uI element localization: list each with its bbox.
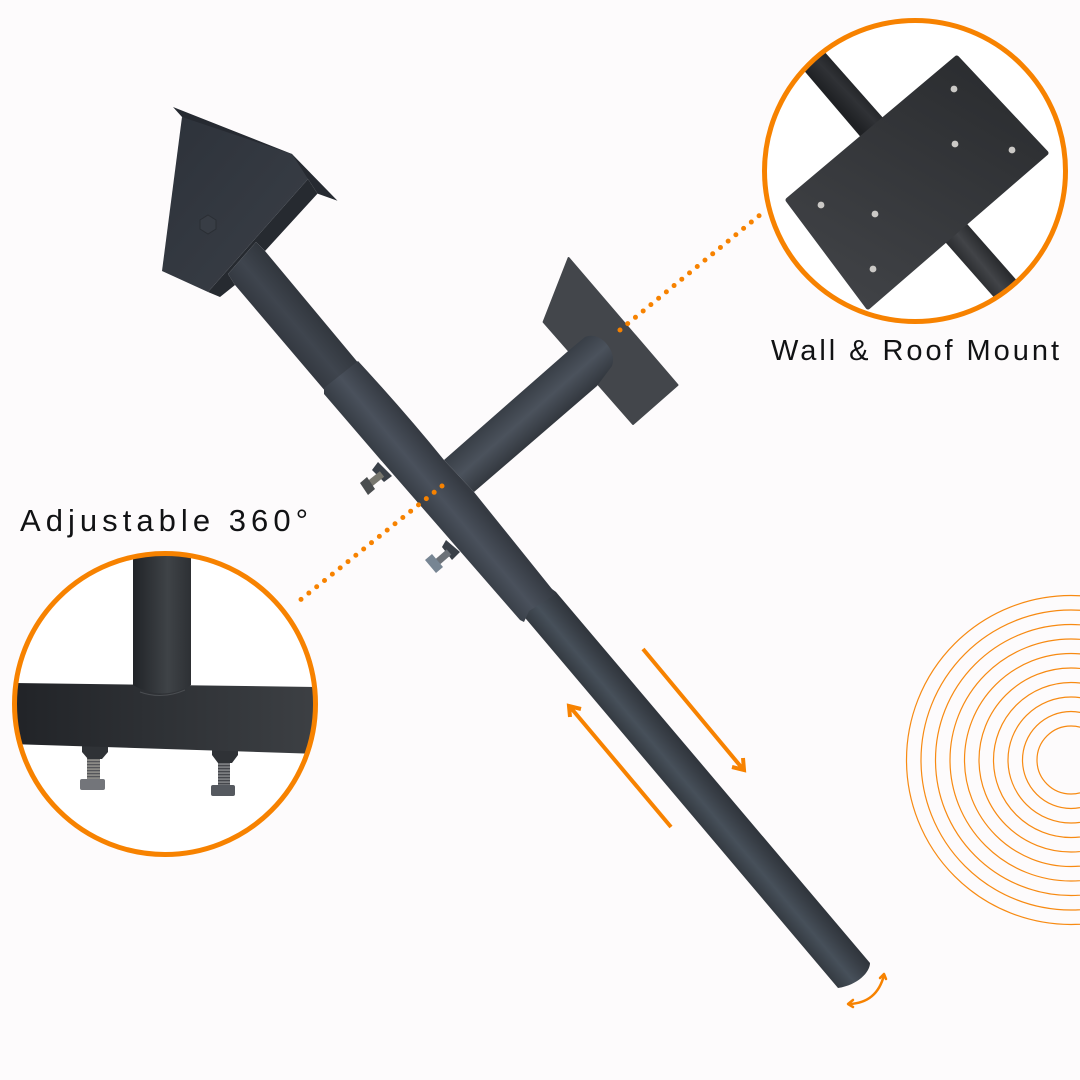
wall plate bbox=[544, 258, 678, 424]
lower pole bbox=[510, 580, 870, 988]
callout: wall and roof mount bbox=[764, 20, 1066, 322]
product: pole mount assembly bbox=[162, 107, 870, 988]
callout: adjustable joint bbox=[10, 550, 320, 855]
vertical pipe bbox=[133, 550, 191, 694]
sleeve bbox=[324, 361, 556, 622]
bolts on pole bbox=[360, 462, 460, 573]
concentric rings decoration bbox=[906, 596, 1080, 924]
dotted leader: wall mount bbox=[620, 210, 766, 330]
dotted leader: adjustable bbox=[294, 486, 442, 605]
mounting plate bbox=[788, 58, 1046, 307]
cross arm bbox=[444, 336, 613, 492]
horizontal pipe bbox=[10, 683, 320, 754]
roof bracket bbox=[162, 107, 338, 297]
label: adjustable 360: Adjustable 360° bbox=[20, 503, 308, 538]
arrow: slide down bbox=[643, 649, 744, 770]
bolts bbox=[80, 744, 238, 796]
arrow: rotation bbox=[848, 974, 886, 1007]
arrow: slide up bbox=[569, 706, 671, 827]
upper pole bbox=[228, 242, 360, 392]
label: wall and roof mount: Wall & Roof Mount bbox=[771, 335, 1059, 367]
